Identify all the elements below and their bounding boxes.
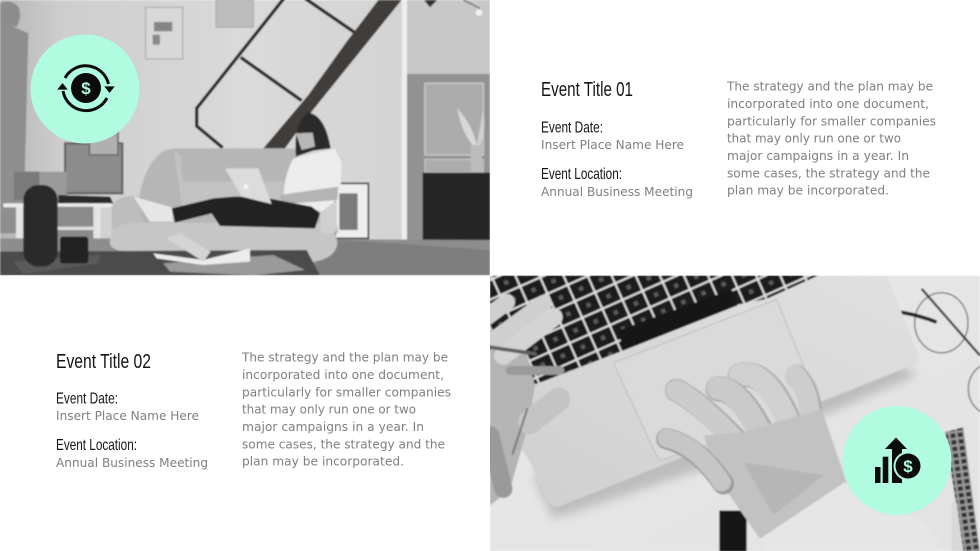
dried plant: [457, 108, 477, 147]
dark sideboard: [423, 173, 490, 250]
staircase beam: [263, 0, 402, 148]
metal frame on wall: [197, 0, 363, 148]
trackpad: [613, 299, 820, 460]
description paragraph: some cases, the strategy and the: [242, 436, 445, 452]
icon: bar chart with arrow and dollar coin: $: [903, 457, 913, 476]
table with vase, cup and books: [0, 250, 320, 275]
bench and frames on left: [65, 143, 122, 193]
event date value: Insert Place Name Here: [56, 408, 199, 423]
description paragraph: plan may be incorporated.: [727, 182, 889, 198]
event date label: Event Date:: [541, 120, 603, 136]
icon: dollar coin with circular arrows: $: [81, 79, 91, 98]
description paragraph: [726, 78, 936, 198]
right hand: [667, 374, 847, 539]
description paragraph: particularly for smaller companies: [727, 114, 936, 128]
description paragraph: The strategy and the plan may be: [726, 78, 933, 94]
heading: event title 02: Event Title 02: [56, 351, 151, 373]
sofa: [138, 148, 338, 233]
photo: hands on a laptop trackpad: [487, 276, 980, 551]
event location value: Annual Business Meeting: [56, 455, 208, 470]
description paragraph: some cases, the strategy and the: [727, 166, 930, 180]
description paragraph: [241, 350, 451, 468]
description paragraph: major campaigns in a year. In: [242, 419, 424, 434]
event location label: Event Location:: [56, 437, 137, 454]
description paragraph: particularly for smaller companies: [242, 384, 451, 400]
event location label: Event Location:: [541, 166, 622, 183]
right wall and door: [408, 0, 475, 74]
description paragraph: incorporated into one document,: [727, 96, 929, 111]
description paragraph: The strategy and the plan may be: [241, 350, 448, 364]
ruler: [945, 427, 980, 551]
description paragraph: that may only run one or two: [727, 130, 901, 146]
cabinet and vase on left: [0, 21, 28, 233]
framed picture behind sofa: [335, 183, 368, 238]
icon: dollar coin with circular arrows: [30, 34, 140, 144]
laptop body: [522, 277, 906, 506]
event date value: Insert Place Name Here: [541, 137, 684, 152]
black strip under hand: [719, 510, 747, 551]
glasses: [901, 289, 980, 414]
description paragraph: plan may be incorporated.: [242, 454, 404, 468]
heading: event title 01: Event Title 01: [541, 79, 633, 101]
description paragraph: that may only run one or two: [242, 402, 416, 416]
posters: [146, 7, 183, 59]
panel: event 01 text: [541, 78, 936, 199]
icon: bar chart with arrow and dollar coin: [842, 406, 952, 515]
event location value: Annual Business Meeting: [541, 184, 693, 199]
sleeve: [797, 482, 846, 514]
left hand: [487, 302, 560, 505]
description paragraph: major campaigns in a year. In: [727, 148, 909, 163]
keyboard: [490, 276, 818, 385]
panel: event 02 text: [56, 350, 451, 470]
photo: woman working on a laptop on a sofa: [0, 0, 490, 275]
woman and laptop: [295, 113, 331, 157]
description paragraph: incorporated into one document,: [242, 367, 444, 382]
floor: [0, 238, 490, 266]
event date label: Event Date:: [56, 390, 118, 408]
